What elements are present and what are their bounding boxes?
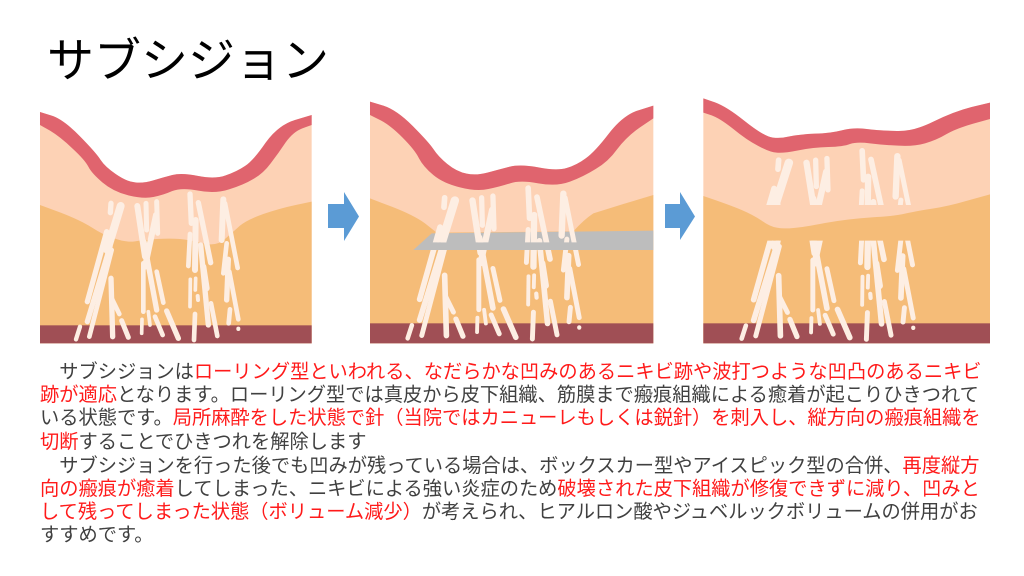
text block: paragraph one: 切断することでひきつれを解除します <box>40 432 366 453</box>
illustrations and arrows <box>40 98 990 344</box>
arrow: step one to two <box>328 192 359 241</box>
epidermis band <box>703 98 990 153</box>
text block: paragraph two: 向の瘢痕が癒着してしまった、ニキビによる強い炎症のため破壊された皮下組織が修復できずに減り、凹みと <box>40 479 980 500</box>
scar fibers <box>76 194 238 340</box>
dermis layer <box>40 112 312 343</box>
subcutaneous layer <box>703 194 990 343</box>
needle blade <box>413 231 653 250</box>
text block: paragraph one <box>40 361 982 453</box>
dermis layer <box>703 98 990 343</box>
epidermis band <box>370 102 653 190</box>
upper separated fibers <box>766 148 911 205</box>
text block: paragraph one: サブシジョンはローリング型といわれる、なだらかな凹みのあるニキビ跡や波打つような凹凸のあるニキビ <box>59 362 982 383</box>
epidermis band <box>40 112 312 198</box>
text block: paragraph two: して残ってしまった状態（ボリューム減少）が考えられ、ヒアルロン酸やジュベルックボリュームの併用がお <box>40 502 978 523</box>
text block: paragraph two: サブシジョンを行った後でも凹みが残っている場合は、ボックスカー型やアイスピック型の合併、再度縦方 <box>59 456 979 477</box>
dermis layer <box>370 102 653 343</box>
text block: paragraph two: すすめです。 <box>40 525 153 546</box>
scar fibers cut by needle <box>408 188 579 339</box>
panel: after treatment <box>703 98 990 343</box>
text block: paragraph one: 跡が適応となります。ローリング型では真皮から皮下組織、筋膜まで瘢痕組織による癒着が起こりひきつれて <box>40 385 979 406</box>
panel: needle inserted <box>370 102 653 343</box>
text block: paragraph one: いる状態です。局所麻酔をした状態で針（当院ではカニューレもしくは鋭針）を刺入し、縦方向の瘢痕組織を <box>40 408 981 429</box>
text block: paragraph two <box>40 455 980 546</box>
fascia band <box>703 323 990 343</box>
subcutaneous layer <box>40 202 312 343</box>
subcutaneous layer <box>370 195 653 343</box>
lower separated fibers <box>739 240 916 342</box>
arrow: step two to three <box>665 192 695 240</box>
fascia band <box>370 323 653 343</box>
title: サブシジョン <box>47 34 329 87</box>
panel: before treatment <box>40 112 312 343</box>
fascia band <box>40 325 312 343</box>
